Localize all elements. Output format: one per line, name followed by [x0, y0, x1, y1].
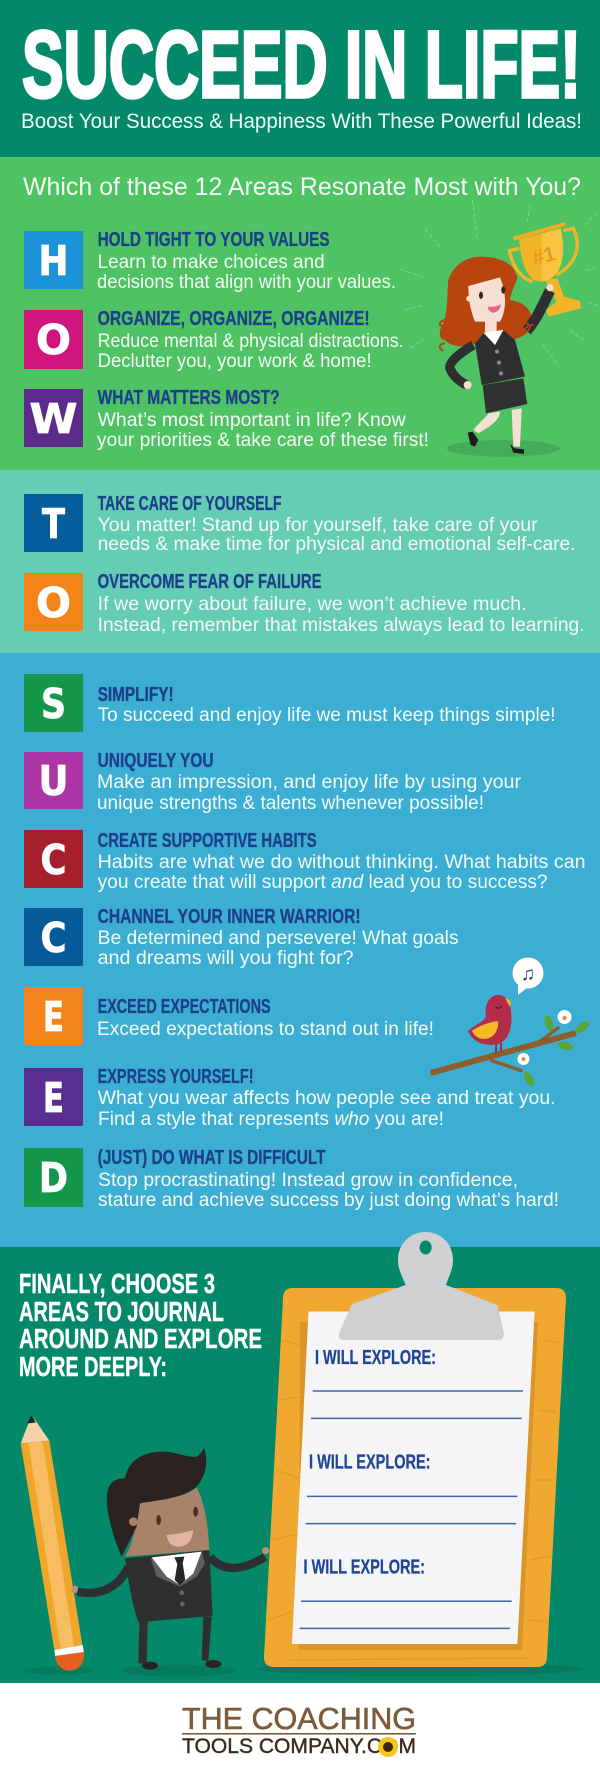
journal prompt 2: I WILL EXPLORE:	[309, 1452, 430, 1474]
journal prompt 2	[306, 1452, 517, 1524]
clip	[339, 1232, 504, 1340]
item body: decisions that align with your values.	[97, 272, 396, 293]
item body: your priorities & take care of these first!	[97, 430, 429, 451]
item: uniquely you	[24, 750, 522, 814]
item heading: HOLD TIGHT TO YOUR VALUES	[98, 229, 330, 251]
item: exceed expectations	[24, 987, 434, 1045]
letter tile E: E	[43, 1074, 64, 1122]
clipboard	[264, 1232, 566, 1667]
item heading: TAKE CARE OF YOURSELF	[98, 493, 282, 515]
letter tile S: S	[41, 680, 66, 728]
letter tile D	[24, 1148, 83, 1207]
item: overcome fear of failure	[24, 571, 585, 636]
item: hold tight to your values	[24, 229, 396, 293]
logo: The Coaching Tools Company	[182, 1701, 416, 1758]
item body	[98, 594, 585, 636]
logo: The Coaching Tools Company: THE COACHING	[182, 1701, 416, 1736]
illustration: businessman	[71, 1448, 269, 1677]
letter tile O	[24, 310, 83, 369]
item body	[98, 928, 459, 969]
item body: What you wear affects how people see and treat you.	[98, 1088, 556, 1109]
letter tile C: C	[40, 836, 66, 884]
section heading: MORE DEEPLY:	[19, 1351, 167, 1382]
letter tile T	[24, 494, 83, 552]
letter tile T: T	[42, 500, 65, 548]
panel: SUCCEED section	[0, 653, 600, 1247]
journal prompt 3: I WILL EXPLORE:	[304, 1556, 425, 1578]
illustration: singing bird on branch: ♫	[521, 964, 535, 985]
letter tile E: E	[43, 993, 64, 1041]
illustration: woman holding trophy: #1	[530, 242, 558, 270]
panel: TO section	[0, 470, 600, 653]
item body: Declutter you, your work & home!	[98, 351, 372, 372]
letter tile W: W	[30, 395, 78, 443]
letter tile H	[24, 231, 83, 289]
letter tile W	[24, 389, 83, 447]
item body	[97, 252, 396, 293]
letter tile C	[24, 830, 83, 888]
item heading: EXPRESS YOURSELF!	[98, 1066, 254, 1088]
item body	[97, 772, 522, 814]
item: channel your inner warrior	[24, 906, 459, 969]
letter tile E	[24, 1068, 83, 1126]
section heading: FINALLY, CHOOSE 3	[19, 1268, 215, 1299]
item: just do what is difficult	[24, 1147, 559, 1211]
item heading: SIMPLIFY!	[98, 684, 174, 706]
illustration: pencil	[21, 1415, 93, 1675]
illustration: woman holding trophy	[400, 200, 600, 457]
section heading	[19, 1268, 262, 1382]
item body: stature and achieve success by just doing what’s hard!	[98, 1190, 559, 1211]
item heading: UNIQUELY YOU	[98, 750, 214, 772]
letter tile U	[24, 752, 83, 809]
item heading: WHAT MATTERS MOST?	[98, 387, 280, 409]
item heading: OVERCOME FEAR OF FAILURE	[98, 571, 322, 593]
item body: needs & make time for physical and emotional self-care.	[98, 534, 576, 555]
item: create supportive habits	[24, 830, 586, 893]
illustration: singing bird on branch	[430, 958, 591, 1088]
item body: Instead, remember that mistakes always lead to learning.	[98, 615, 585, 636]
section heading: Which of these 12 Areas Resonate Most with You?	[23, 173, 581, 201]
journal prompt 1	[311, 1347, 523, 1418]
journal prompt 1: I WILL EXPLORE:	[315, 1347, 436, 1369]
section heading: AREAS TO JOURNAL	[19, 1296, 224, 1327]
item body: Learn to make choices and	[98, 252, 325, 273]
item: take care of yourself	[24, 493, 576, 555]
letter tile O: O	[36, 316, 71, 364]
item body: Habits are what we do without thinking. What habits can	[98, 852, 586, 873]
item: organize	[24, 308, 404, 372]
item body: unique strengths & talents whenever possible!	[97, 793, 484, 814]
item body	[98, 515, 576, 555]
journal prompt 3	[300, 1556, 512, 1628]
letter tile O: O	[36, 579, 71, 627]
item body	[98, 1088, 556, 1130]
item body: If we worry about failure, we won’t achieve much.	[98, 594, 527, 615]
logo: The Coaching Tools Company: TOOLS COMPANY.COM	[182, 1735, 416, 1758]
item body: You matter! Stand up for yourself, take care of your	[98, 515, 538, 536]
item: simplify	[24, 674, 556, 732]
item body	[98, 852, 586, 893]
letter tile D: D	[39, 1154, 68, 1202]
subtitle: Boost Your Success & Happiness With These Powerful Ideas!	[21, 110, 582, 133]
item heading: ORGANIZE, ORGANIZE, ORGANIZE!	[98, 308, 370, 330]
item body: Stop procrastinating! Instead grow in confidence,	[98, 1170, 518, 1191]
icon: sunflower	[378, 1737, 398, 1757]
item heading: CREATE SUPPORTIVE HABITS	[98, 830, 317, 852]
item heading: EXCEED EXPECTATIONS	[98, 996, 271, 1018]
panel: title header	[0, 0, 600, 157]
item heading: CHANNEL YOUR INNER WARRIOR!	[98, 906, 361, 928]
item body	[98, 1170, 559, 1211]
letter tile H: H	[38, 237, 68, 285]
item body: and dreams will you fight for?	[98, 948, 354, 969]
item body: Find a style that represents who you are!	[98, 1109, 444, 1130]
item body	[97, 410, 429, 451]
letter tile O	[24, 573, 83, 631]
letter tile U: U	[38, 757, 68, 805]
panel: final journal section	[0, 1232, 600, 1683]
item body: you create that will support and lead you to success?	[98, 872, 548, 893]
item body	[98, 331, 404, 372]
letter tile E	[24, 987, 83, 1045]
panel: HOW section	[0, 157, 600, 470]
item body: Reduce mental & physical distractions.	[98, 331, 404, 352]
section heading: AROUND AND EXPLORE	[19, 1323, 262, 1354]
item heading: (JUST) DO WHAT IS DIFFICULT	[98, 1147, 326, 1169]
item: express yourself	[24, 1066, 556, 1130]
item body: Be determined and persevere! What goals	[98, 928, 459, 949]
letter tile C	[24, 908, 83, 966]
letter tile S	[24, 674, 83, 732]
item body: Make an impression, and enjoy life by using your	[97, 772, 522, 793]
item body: Exceed expectations to stand out in life!	[97, 1019, 434, 1040]
letter tile C: C	[40, 914, 66, 962]
item body: To succeed and enjoy life we must keep things simple!	[98, 705, 556, 726]
item: what matters most	[24, 387, 429, 451]
item body: What’s most important in life? Know	[98, 410, 406, 431]
